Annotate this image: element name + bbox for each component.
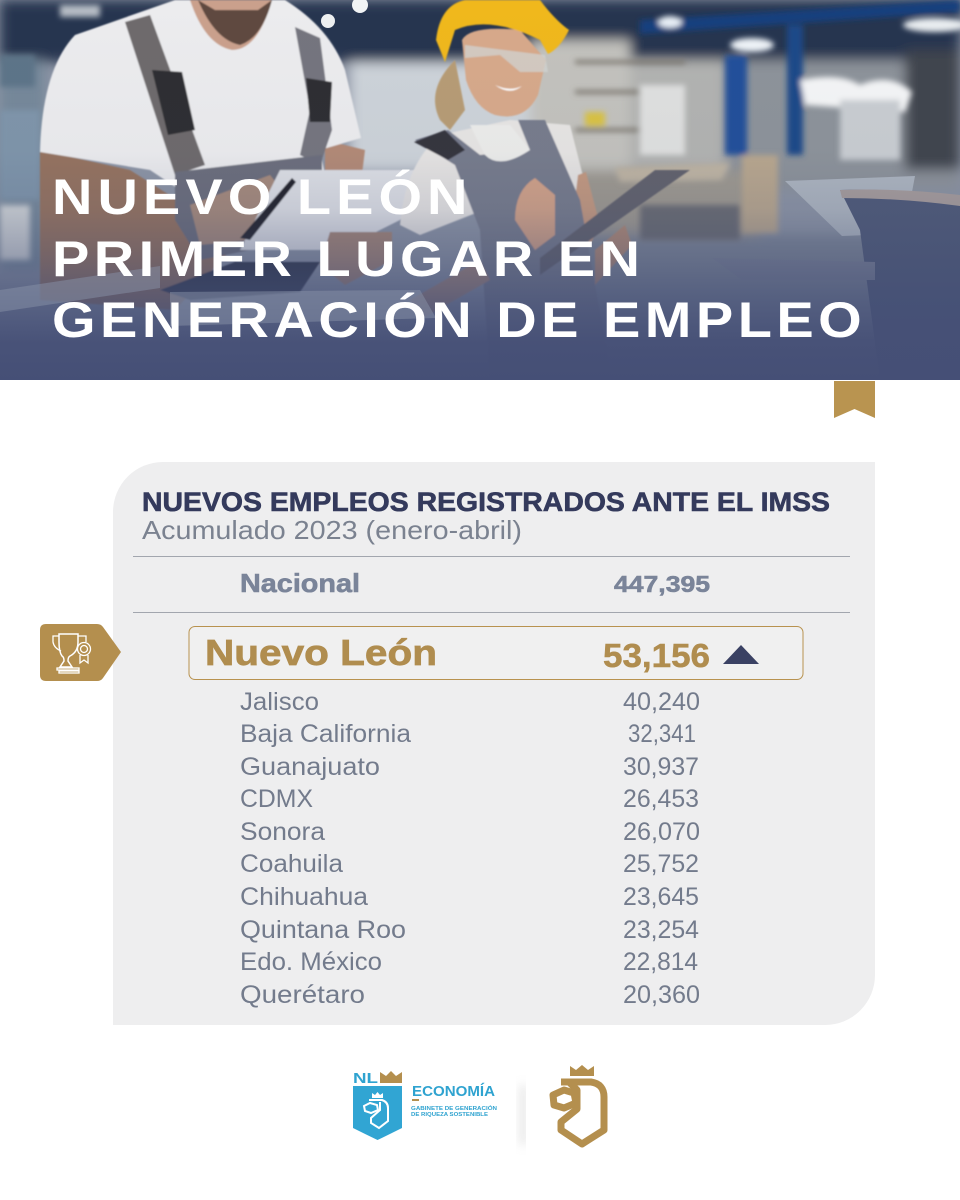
row: Nuevo León highlight: [189, 626, 803, 680]
row: Nacional: 447,395: [614, 571, 710, 597]
title: GENERACIÓN DE EMPLEO: [52, 292, 862, 348]
state rows: Quintana Roo: [240, 916, 406, 944]
logo: NL Economía: DE RIQUEZA SOSTENIBLE: [411, 1112, 488, 1118]
row: Nacional: [240, 568, 710, 598]
heading: NUEVOS EMPLEOS REGISTRADOS ANTE EL IMSS: [142, 487, 830, 517]
state rows: Baja California: [240, 720, 411, 748]
state values: 25,752: [623, 850, 699, 878]
economia text: ECONOMÍA: [412, 1083, 496, 1100]
title: PRIMER LUGAR EN: [52, 232, 640, 287]
man: [40, 0, 430, 310]
state rows: Coahuila: [240, 850, 343, 878]
icon: up triangle: [723, 645, 759, 664]
state rows: Guanajuato: [240, 753, 380, 781]
state rows: Jalisco: [240, 688, 319, 716]
woman: [399, 0, 690, 312]
subheading: Acumulado 2023 (enero-abril): [142, 515, 522, 545]
state rows: Sonora: [240, 818, 325, 846]
state values: 32,341: [628, 720, 696, 748]
ribbon bookmark: [834, 381, 875, 418]
shield: [353, 1086, 402, 1140]
state values: [623, 688, 700, 1009]
row: Nuevo León highlight: Nuevo León: [205, 632, 437, 673]
logo: NL Economía: [353, 1070, 497, 1140]
row: Nuevo León highlight: 53,156: [603, 637, 710, 674]
state rows: Chihuahua: [240, 883, 368, 911]
title: NUEVO LEÓN: [52, 169, 468, 225]
NL wordmark: NL: [353, 1070, 378, 1087]
state values: 30,937: [623, 753, 699, 781]
state values: 23,254: [623, 916, 699, 944]
hero photo: factory workers: [0, 0, 960, 380]
machine parts: [785, 176, 915, 236]
logo: gold lion: [553, 1065, 604, 1144]
state rows: [240, 688, 411, 1009]
state values: 40,240: [623, 688, 700, 716]
icon: trophy tag: [40, 624, 121, 681]
panel: nuevos empleos table: [113, 462, 875, 1025]
state rows: CDMX: [240, 785, 313, 813]
state values: 22,814: [623, 948, 698, 976]
row: Nacional: Nacional: [240, 568, 360, 598]
title: [52, 169, 862, 348]
logo: NL Economía: GABINETE DE GENERACIÓN: [411, 1104, 497, 1112]
state values: 23,645: [623, 883, 699, 911]
factory background: [0, 0, 960, 270]
state rows: Edo. México: [240, 948, 382, 976]
navy gradient overlay: [0, 160, 960, 380]
state values: 20,360: [623, 981, 700, 1009]
state values: 26,453: [623, 785, 699, 813]
state values: 26,070: [623, 818, 700, 846]
state rows: Querétaro: [240, 981, 365, 1009]
